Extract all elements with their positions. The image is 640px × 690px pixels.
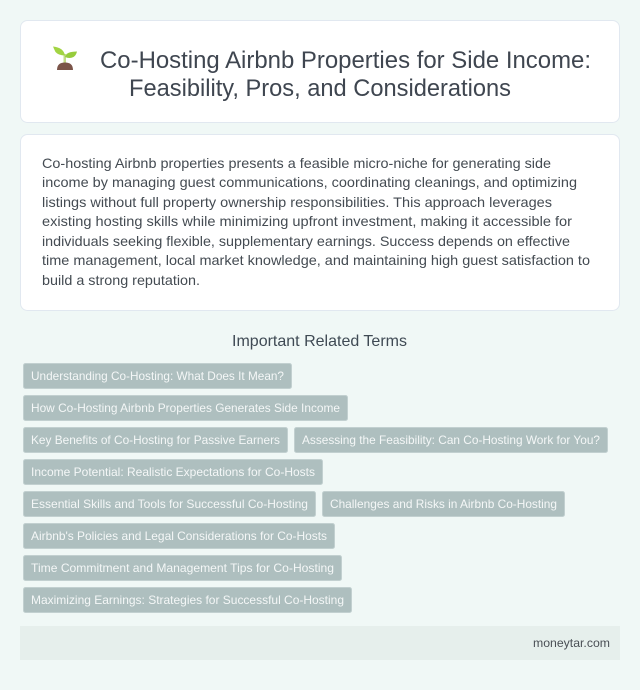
tag: Essential Skills and Tools for Successful Co-Hosting	[31, 497, 308, 511]
heading: important related terms: Important Related Terms	[232, 333, 407, 350]
tag	[24, 364, 292, 388]
tag	[294, 428, 608, 452]
tag	[24, 524, 334, 548]
title: Feasibility, Pros, and Considerations	[129, 75, 511, 102]
tag	[24, 428, 288, 452]
intro text: listings without full property ownership responsibilities. This approach leverages	[42, 194, 552, 210]
footer	[20, 626, 620, 660]
tag	[24, 556, 342, 580]
tag: Key Benefits of Co-Hosting for Passive Earners	[31, 433, 280, 447]
footer: moneytar.com	[533, 636, 610, 650]
intro text: build a strong reputation.	[42, 272, 200, 288]
icon: sprout	[53, 46, 77, 70]
tag	[24, 588, 352, 612]
title	[100, 47, 591, 102]
tag	[322, 492, 564, 516]
tag list	[24, 364, 608, 612]
intro text	[42, 155, 590, 288]
tag: Time Commitment and Management Tips for Co-Hosting	[31, 561, 334, 575]
tag: Assessing the Feasibility: Can Co-Hosting Work for You?	[302, 433, 600, 447]
tag: Understanding Co-Hosting: What Does It Mean?	[31, 369, 284, 383]
tag	[24, 492, 316, 516]
tag: How Co-Hosting Airbnb Properties Generates Side Income	[31, 401, 340, 415]
intro text: Co-hosting Airbnb properties presents a feasible micro-niche for generating side	[42, 155, 551, 171]
panel: intro paragraph	[20, 134, 620, 310]
tag: Maximizing Earnings: Strategies for Successful Co-Hosting	[31, 593, 344, 607]
intro text: existing hosting skills while minimizing upfront investment, making it accessible for	[42, 213, 572, 229]
tag: Airbnb's Policies and Legal Considerations for Co-Hosts	[31, 529, 327, 543]
title: Co-Hosting Airbnb Properties for Side Income:	[100, 47, 591, 74]
intro text: individuals seeking flexible, supplementary earnings. Success depends on effective	[42, 233, 570, 249]
tag: Income Potential: Realistic Expectations for Co-Hosts	[31, 465, 315, 479]
intro text: income by managing guest communications, coordinating cleanings, and optimizing	[42, 174, 577, 190]
tag	[24, 396, 348, 420]
intro text: time management, local market knowledge, and maintaining high guest satisfaction to	[42, 252, 590, 268]
tag: Challenges and Risks in Airbnb Co-Hosting	[330, 497, 557, 511]
tag	[24, 460, 322, 484]
panel: title header	[20, 20, 620, 122]
